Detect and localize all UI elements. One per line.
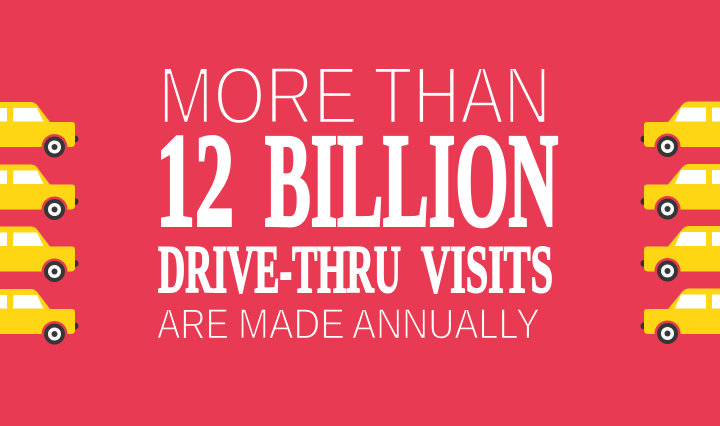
icon: right car 4 [640,288,720,346]
icon: left car 3 [0,226,78,284]
heading: more than [158,51,551,142]
caption: are made annually: MADE [238,301,345,349]
icon: right car 1 [640,102,720,160]
heading: more than: MORE [158,51,358,142]
heading: 12 billion: 12 [156,106,234,254]
heading: drive-thru visits: DRIVE-THRU [158,231,401,307]
heading: drive-thru visits: VISITS [421,231,553,307]
heading: more than: THAN [373,51,551,142]
icon: left car 2 [0,164,78,222]
icon: right car 3 [640,226,720,284]
right column of cars [640,102,720,346]
icon: left car 1 [0,102,78,160]
heading: 12 billion [156,106,558,254]
caption: are made annually: ARE [157,301,229,349]
caption: are made annually [157,301,540,349]
caption: are made annually: ANNUALLY [352,301,540,349]
left column of cars [0,102,78,347]
icon: right car 2 [640,164,720,222]
icon: left car 4 [0,289,78,347]
